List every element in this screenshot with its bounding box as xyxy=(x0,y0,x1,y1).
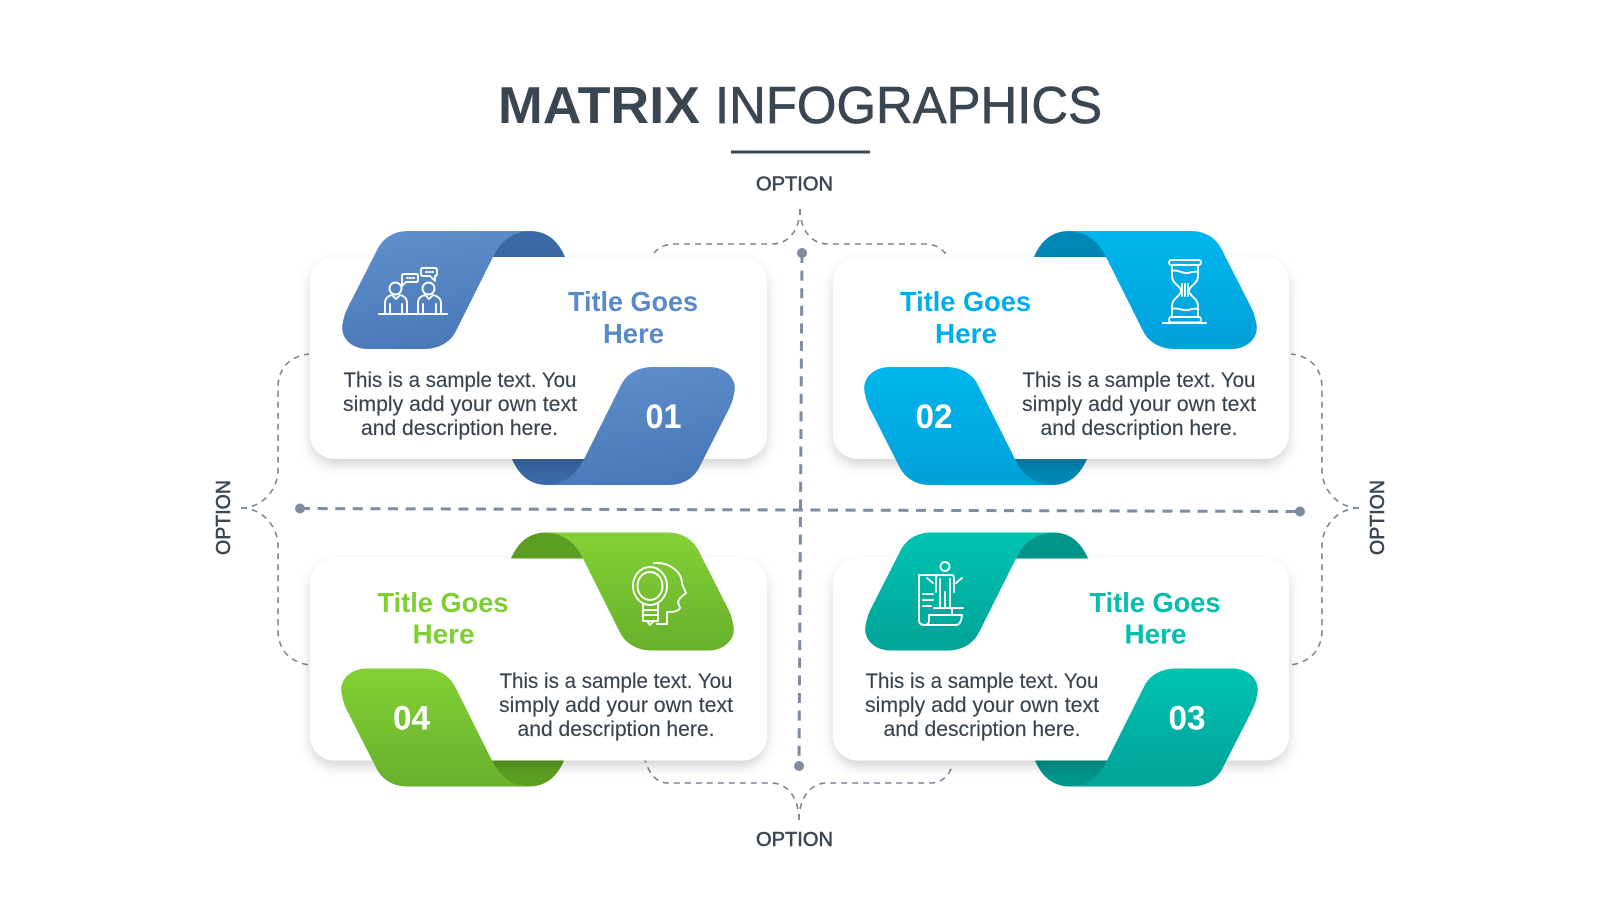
icon: light bulb and head xyxy=(633,563,686,625)
ribbon: top with icon xyxy=(865,532,1057,650)
label: option right: OPTION xyxy=(1367,480,1389,555)
description: simply add your own text xyxy=(865,694,1099,717)
description: and description here. xyxy=(518,718,714,741)
description xyxy=(1022,369,1256,440)
description: simply add your own text xyxy=(1022,393,1256,416)
heading: Title Goes xyxy=(378,587,508,618)
number: 01 xyxy=(646,398,682,436)
heading: Here xyxy=(1124,618,1186,650)
description: and description here. xyxy=(884,718,1080,741)
description: simply add your own text xyxy=(343,393,577,416)
icon: person standing on scroll xyxy=(919,562,963,625)
description: This is a sample text. You xyxy=(1022,369,1256,392)
description: and description here. xyxy=(1040,417,1238,440)
panel: card 03 xyxy=(833,532,1289,786)
number: 02 xyxy=(916,398,952,436)
heading xyxy=(900,286,1031,349)
heading: Title Goes xyxy=(568,286,698,317)
description: This is a sample text. You xyxy=(500,670,732,693)
heading: Here xyxy=(412,618,474,650)
description xyxy=(865,670,1099,741)
description: This is a sample text. You xyxy=(344,369,576,392)
ribbon: top with icon xyxy=(342,231,534,349)
description: simply add your own text xyxy=(499,694,733,717)
icon: hourglass xyxy=(1163,260,1206,323)
description: This is a sample text. You xyxy=(866,670,1098,693)
ribbon: number xyxy=(864,367,1056,485)
icon: two people talking xyxy=(379,268,447,314)
heading xyxy=(378,587,508,650)
title: INFOGRAPHICS xyxy=(715,77,1102,135)
bracket: right xyxy=(1291,354,1359,665)
bracket: top xyxy=(651,209,946,257)
ribbon: top with icon xyxy=(542,532,734,650)
label: option top: OPTION xyxy=(756,174,833,196)
heading: Here xyxy=(935,318,997,349)
heading: Title Goes xyxy=(900,286,1031,317)
title xyxy=(498,77,1102,135)
ribbon: top with icon xyxy=(1065,231,1257,349)
vertical axis xyxy=(794,248,807,771)
heading xyxy=(568,286,698,349)
label: option bottom: OPTION xyxy=(756,829,833,851)
description: and description here. xyxy=(361,417,558,440)
ribbon: number xyxy=(341,668,533,786)
panel: card 02 xyxy=(833,231,1289,485)
number: 03 xyxy=(1168,700,1206,738)
bracket: left xyxy=(241,354,309,665)
horizontal axis xyxy=(295,504,1305,516)
ribbon: number xyxy=(543,367,735,485)
heading xyxy=(1090,587,1220,650)
title: MATRIX xyxy=(498,77,700,135)
label: option left: OPTION xyxy=(213,480,235,555)
number: 04 xyxy=(393,700,430,738)
heading: Here xyxy=(603,318,664,349)
description xyxy=(343,369,577,440)
bracket: bottom xyxy=(645,760,953,820)
description xyxy=(499,670,733,741)
panel: card 01 xyxy=(310,231,767,485)
heading: Title Goes xyxy=(1090,587,1220,618)
ribbon: number xyxy=(1066,668,1258,786)
title underline xyxy=(731,150,870,154)
panel: card 04 xyxy=(310,532,767,786)
